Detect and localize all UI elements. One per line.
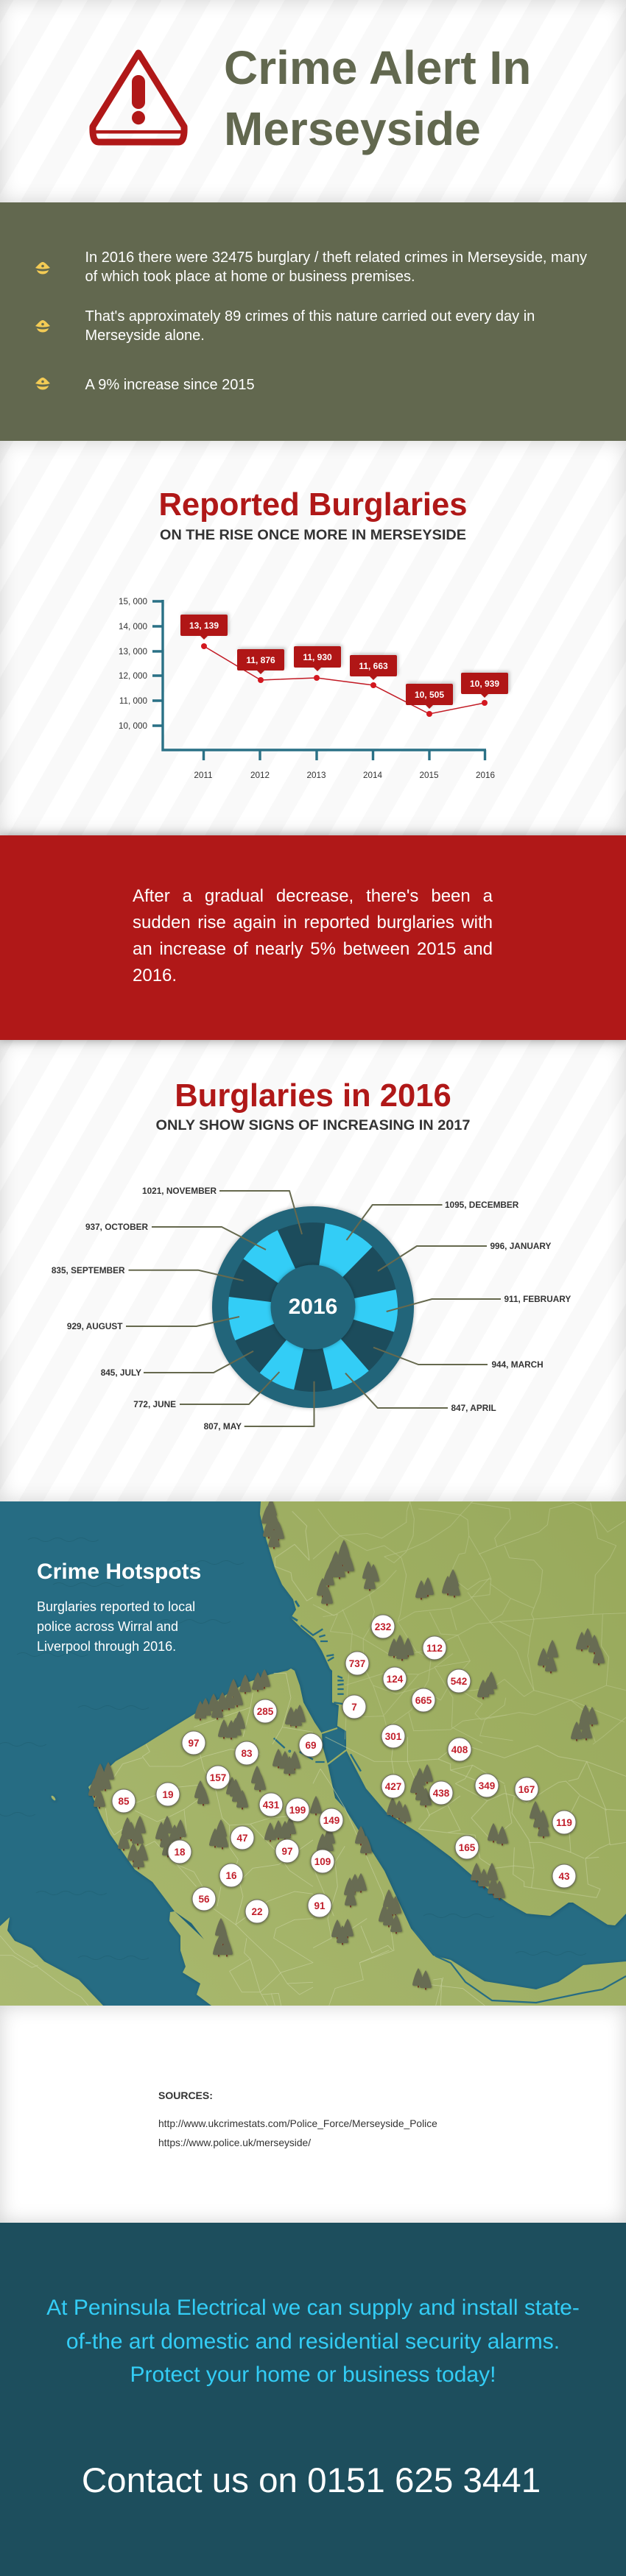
- heading: crime hotspots: Crime Hotspots: [37, 1560, 201, 1584]
- hotspot 285: [253, 1699, 277, 1723]
- hotspot 22: 22: [251, 1906, 263, 1917]
- hotspot 56: [192, 1887, 216, 1911]
- panel: burglaries in 2016: [0, 1040, 626, 1501]
- roads south-east: [313, 1737, 626, 2006]
- leader: May: [204, 1381, 314, 1432]
- sources list: http://www.ukcrimestats.com/Police_Force/Merseyside_Police: [158, 2118, 437, 2129]
- x axis labels: 2011: [194, 771, 213, 780]
- x axis labels: 2014: [363, 771, 382, 780]
- hotspot 665: [412, 1688, 435, 1712]
- hotspot 112: 112: [426, 1643, 443, 1654]
- y axis labels: 10, 000: [119, 721, 147, 731]
- hotspot 97 south: 97: [281, 1846, 293, 1857]
- x axis labels: 2012: [250, 771, 270, 780]
- leader: September: 835, SEPTEMBER: [52, 1265, 125, 1275]
- x axis labels: 2016: [476, 771, 495, 780]
- hotspot 22: [245, 1900, 269, 1923]
- hotspot 349: [475, 1774, 499, 1797]
- y axis labels: 15, 000: [119, 597, 147, 606]
- value tag 2016: [461, 673, 508, 698]
- hotspot 665: 665: [415, 1695, 432, 1706]
- leader: May: 807, MAY: [204, 1421, 242, 1432]
- value tag 2013: 11, 930: [303, 652, 332, 662]
- leader: March: [373, 1348, 544, 1370]
- hotspot 43: 43: [558, 1871, 570, 1882]
- hotspot 85: 85: [118, 1796, 130, 1807]
- leader: October: [85, 1222, 266, 1250]
- value tag 2014: 11, 663: [359, 661, 388, 671]
- docks: [274, 1625, 361, 1772]
- hotspot 19: 19: [162, 1789, 174, 1800]
- sources list: [158, 2118, 437, 2148]
- hotspot 19: [156, 1783, 180, 1806]
- panel: red callout: [0, 835, 626, 1040]
- hotspot 438: 438: [433, 1788, 450, 1799]
- pie centre label: 2016: [289, 1295, 337, 1319]
- icon: police hat 3: [35, 378, 50, 390]
- title: [224, 41, 531, 155]
- sources list: https://www.police.uk/merseyside/: [158, 2137, 311, 2148]
- hotspot 97 south: [275, 1839, 299, 1863]
- value tag 2015: [406, 684, 453, 709]
- hotspot 43: [552, 1864, 576, 1888]
- roads Wirral: [0, 1744, 313, 2006]
- icon: police hat 2: [35, 320, 50, 333]
- leader: August: [67, 1317, 239, 1331]
- roads north of river: [313, 1501, 626, 1744]
- hotspot 157: 157: [210, 1772, 226, 1783]
- y axis labels: 12, 000: [119, 671, 147, 681]
- leader: June: [133, 1372, 279, 1409]
- value tag 2012: [237, 649, 284, 674]
- chart axes: [152, 600, 486, 760]
- hotspot 83: [235, 1741, 259, 1765]
- map description: [37, 1599, 195, 1654]
- hotspot 69: 69: [305, 1740, 317, 1751]
- fact: 32475 crimes: In 2016 there were 32475 burglary / theft related crimes in Merseyside, many: [85, 250, 587, 266]
- sources heading: SOURCES:: [158, 2090, 213, 2101]
- hotspot 408: [448, 1738, 471, 1761]
- icon: police hat 1: [35, 262, 50, 274]
- hotspot 349: 349: [479, 1780, 495, 1791]
- title: Crime Alert In: [224, 41, 531, 94]
- hotspot 16: [219, 1864, 243, 1887]
- hotspot 737: 737: [349, 1658, 365, 1669]
- hotspot 56: 56: [198, 1894, 210, 1905]
- heading: Burglaries in 2016: [175, 1078, 451, 1114]
- leader: April: [345, 1373, 496, 1413]
- hotspot 124: [383, 1667, 407, 1691]
- hotspot 124: 124: [387, 1674, 404, 1685]
- leader: September: [52, 1265, 244, 1281]
- hotspot 7: 7: [351, 1702, 357, 1713]
- x axis labels: 2013: [306, 771, 326, 780]
- hotspot 167: 167: [518, 1784, 535, 1795]
- hotspot 232: [371, 1615, 395, 1638]
- land masses: [0, 1501, 626, 2006]
- heading: Reported Burglaries: [158, 487, 468, 523]
- leader: July: 845, JULY: [101, 1367, 141, 1378]
- hotspot 431: [259, 1793, 283, 1816]
- hotspot 69: [299, 1733, 323, 1757]
- leader: February: [387, 1294, 571, 1312]
- y axis labels: 14, 000: [119, 622, 147, 631]
- fact: 32475 crimes: [85, 250, 587, 285]
- line chart: [119, 597, 508, 780]
- y axis labels: 11, 000: [119, 696, 147, 706]
- promo text: At Peninsula Electrical we can supply and install state-: [46, 2296, 580, 2320]
- value tag 2011: [180, 615, 228, 640]
- map description: Burglaries reported to local: [37, 1599, 195, 1614]
- hotspot 427: 427: [385, 1781, 401, 1792]
- hotspot 97 north: 97: [188, 1738, 200, 1749]
- fact: 89 crimes a day: That's approximately 89 crimes of this nature carried out every day in: [85, 308, 535, 325]
- hotspot markers: [112, 1615, 576, 1923]
- hotspot 119: 119: [556, 1817, 572, 1828]
- value tag 2015: 10, 505: [415, 690, 444, 700]
- hotspot 85: [112, 1789, 136, 1813]
- value tag 2012: 11, 876: [246, 655, 275, 665]
- hotspot 427: [381, 1774, 405, 1798]
- hotspot 737: [345, 1652, 369, 1675]
- hotspot 112: [423, 1636, 446, 1660]
- fact: 89 crimes a day: Merseyside alone.: [85, 328, 205, 344]
- hotspot 97 north: [182, 1731, 205, 1755]
- x axis labels: 2015: [419, 771, 439, 780]
- value tag 2016: 10, 939: [470, 679, 499, 689]
- hotspot 165: 165: [459, 1842, 476, 1853]
- panel: sources: [0, 2006, 626, 2223]
- callout text: After a gradual decrease, there's been a sudden rise again in reported burglaries with an increase of nearly 5% between 2015 and 2016.: [133, 886, 493, 986]
- hotspot 165: [455, 1836, 479, 1859]
- hotspot 18: 18: [174, 1847, 186, 1858]
- fact: 32475 crimes: of which took place at home or business premises.: [85, 269, 415, 285]
- value tag 2011: 13, 139: [189, 620, 219, 631]
- panel: key facts: [0, 202, 626, 441]
- leader: March: 944, MARCH: [492, 1359, 544, 1370]
- subheading: ONLY SHOW SIGNS OF INCREASING IN 2017: [156, 1118, 470, 1133]
- promo text: [46, 2296, 580, 2387]
- map description: Liverpool through 2016.: [37, 1639, 176, 1654]
- icon: warning triangle: [92, 53, 185, 142]
- water waves: [0, 1538, 586, 1959]
- hotspot 7: [342, 1695, 366, 1719]
- leader: January: 996, JANUARY: [490, 1241, 551, 1251]
- hotspot 149: [320, 1808, 343, 1832]
- hotspot 91: 91: [314, 1900, 326, 1911]
- leader: July: [101, 1351, 253, 1378]
- hotspot 542: [447, 1669, 471, 1693]
- hotspot 301: [381, 1724, 405, 1748]
- hotspot 18: [168, 1840, 191, 1864]
- hotspot 109: [311, 1850, 334, 1873]
- hotspot 47: 47: [236, 1833, 248, 1844]
- hotspot 167: [515, 1777, 538, 1801]
- leader: April: 847, APRIL: [451, 1403, 496, 1413]
- hotspot 83: 83: [241, 1748, 253, 1759]
- hotspot 91: [308, 1894, 331, 1917]
- leader: November: [142, 1186, 302, 1234]
- hotspot 301: 301: [385, 1731, 402, 1742]
- hotspot 47: [231, 1826, 254, 1850]
- promo text: of-the art domestic and residential security alarms.: [66, 2329, 560, 2354]
- value tag 2014: [350, 655, 397, 680]
- hotspot 285: 285: [257, 1706, 274, 1717]
- panel: call to action: [0, 2223, 626, 2576]
- promo text: Protect your home or business today!: [130, 2363, 496, 2387]
- hotspot 119: [552, 1811, 576, 1834]
- hotspot 199: 199: [289, 1805, 306, 1816]
- leader: February: 911, FEBRUARY: [504, 1294, 571, 1304]
- fact: 89 crimes a day: [85, 308, 535, 344]
- subheading: ON THE RISE ONCE MORE IN MERSEYSIDE: [160, 528, 466, 543]
- panel: header: [0, 0, 626, 202]
- hotspot 542: 542: [451, 1676, 467, 1687]
- data line: [201, 643, 488, 717]
- panel: crime hotspots map: [0, 1501, 626, 2006]
- panel: reported burglaries: [0, 441, 626, 835]
- leader: October: 937, OCTOBER: [85, 1222, 148, 1232]
- leader: June: 772, JUNE: [133, 1399, 176, 1409]
- leader: December: [346, 1200, 519, 1240]
- map description: police across Wirral and: [37, 1619, 178, 1634]
- leader: December: 1095, DECEMBER: [445, 1200, 519, 1210]
- leader: November: 1021, NOVEMBER: [142, 1186, 217, 1196]
- y axis labels: [119, 597, 147, 731]
- contact line: Contact us on 0151 625 3441: [82, 2461, 541, 2500]
- roads far north-west: [194, 1511, 313, 1744]
- x axis labels: [194, 771, 495, 780]
- hotspot 438: [429, 1781, 453, 1805]
- pie chart: [212, 1206, 414, 1408]
- hotspot 199: [286, 1798, 309, 1822]
- hotspot 408: 408: [451, 1744, 468, 1755]
- leader: August: 929, AUGUST: [67, 1321, 123, 1331]
- hotspot 157: [206, 1766, 230, 1789]
- fact: 9% increase: A 9% increase since 2015: [85, 377, 255, 393]
- bridges and canal: [290, 1601, 626, 2003]
- value tag 2013: [294, 646, 341, 671]
- tree clusters: [88, 1498, 605, 1990]
- hotspot 109: 109: [314, 1856, 331, 1867]
- leader: January: [378, 1241, 551, 1271]
- title: Merseyside: [224, 102, 481, 155]
- y axis labels: 13, 000: [119, 647, 147, 657]
- hotspot 16: 16: [225, 1870, 237, 1881]
- hotspot 232: 232: [375, 1621, 391, 1632]
- hotspot 149: 149: [323, 1815, 340, 1826]
- hotspot 431: 431: [263, 1800, 280, 1811]
